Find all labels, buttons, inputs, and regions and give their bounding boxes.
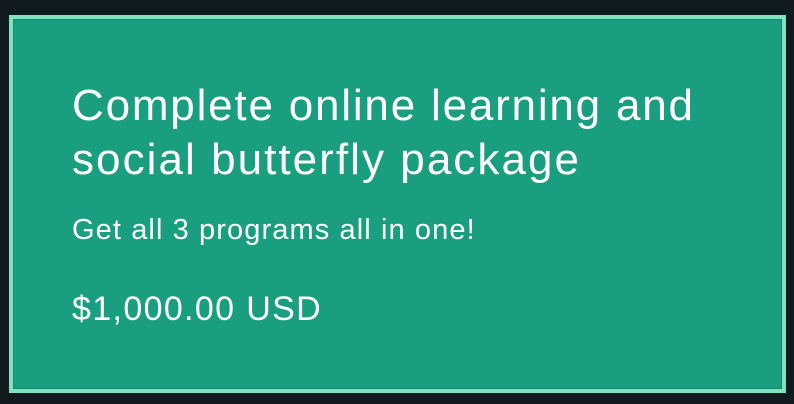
heading: package title (72, 81, 695, 184)
text block: price: $1,000.00 USD (72, 290, 322, 328)
text block: subtitle: Get all 3 programs all in one! (72, 214, 476, 246)
heading: package title: Complete online learning and (72, 81, 695, 130)
heading: package title: social butterfly package (72, 135, 581, 184)
